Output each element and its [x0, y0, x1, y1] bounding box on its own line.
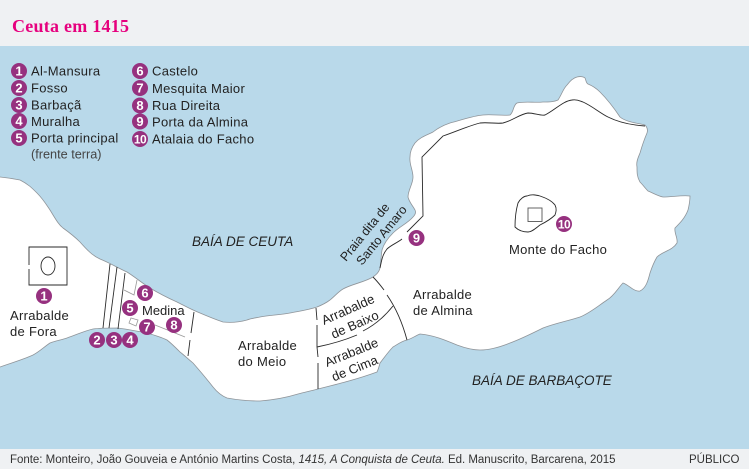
isthmus walls: fosso, barbaca, muralha: [103, 264, 194, 356]
district label: Medina: Medina: [142, 303, 185, 318]
legend label 7: Mesquita Maior: [152, 81, 245, 96]
map: land of Ceuta: [0, 77, 690, 401]
header band: [0, 0, 749, 46]
district label: Arrabalde de Baixo: Arrabalde: [319, 291, 377, 328]
legend label 5: Porta principal: [31, 130, 119, 146]
legend item 2: [11, 80, 27, 96]
legend item 6: [132, 63, 148, 79]
legend item 4: [11, 113, 27, 129]
legend item 10: 10: [134, 132, 147, 146]
legend item 8: [132, 98, 148, 114]
legend item 7: 7: [136, 80, 144, 96]
legend label 9: Porta da Almina: [152, 114, 249, 130]
legend item 6: 6: [136, 64, 144, 78]
fort of Al-Mansura: [29, 247, 67, 285]
beach label: Santo Amaro: [354, 203, 410, 268]
map marker 5: [122, 300, 138, 316]
publisher credit: PÚBLICO: [689, 453, 740, 466]
legend label 8: Rua Direita: [152, 98, 221, 113]
map marker 8: [166, 317, 182, 333]
map marker 7: [139, 319, 155, 335]
legend label 2: Fosso: [31, 80, 68, 96]
title: Ceuta em 1415: [12, 16, 129, 36]
map marker 6: [137, 285, 153, 301]
legend item 9: [132, 114, 148, 130]
map marker 9: [408, 230, 424, 246]
legend item 3: [11, 97, 27, 113]
map marker 6: 6: [141, 286, 149, 300]
map marker 9: 9: [413, 230, 420, 246]
legend label 10: Atalaia do Facho: [152, 132, 254, 146]
bay label Ceuta: BAÍA DE CEUTA: [192, 234, 293, 249]
legend item 10: [132, 131, 148, 147]
legend label 1: Al-Mansura: [31, 64, 101, 78]
footer band: [0, 449, 749, 469]
map marker 8: 8: [170, 318, 178, 332]
legend item 3: 3: [15, 98, 23, 112]
legend: [11, 63, 254, 162]
district label: Arrabalde de Fora: de Fora: [10, 324, 57, 339]
legend item 5: 5: [15, 130, 23, 146]
legend item 8: 8: [136, 98, 144, 113]
medina streets and mosque: [124, 280, 185, 337]
legend note 5: (frente terra): [31, 148, 102, 162]
map marker 5: 5: [126, 300, 134, 316]
map marker 1: 1: [40, 288, 48, 304]
legend item 4: 4: [15, 114, 23, 128]
district label: Arrabalde do Meio: Arrabalde: [238, 338, 297, 353]
district label: Arrabalde de Cima: Arrabalde: [323, 335, 380, 370]
district label: Arrabalde de Fora: Arrabalde: [10, 308, 69, 323]
legend item 9: 9: [136, 114, 144, 129]
legend label 3: Barbaçã: [31, 98, 82, 112]
map marker 10: [556, 216, 572, 232]
map marker 1: [36, 288, 52, 304]
legend item 7: [132, 80, 148, 96]
map marker 3: 3: [110, 332, 118, 348]
legend item 1: [11, 63, 27, 79]
legend label 6: Castelo: [152, 64, 198, 78]
district boundaries: [316, 277, 407, 389]
city wall of Almina: [380, 100, 645, 268]
map marker 4: 4: [126, 332, 134, 348]
legend item 5: [11, 130, 27, 146]
Monte do Facho hill and tower: [515, 195, 556, 232]
map marker 2: [89, 332, 105, 348]
bay label Barbacote: BAÍA DE BARBAÇOTE: [472, 373, 613, 388]
district label: Arrabalde de Almina: Arrabalde: [413, 287, 472, 302]
district label: Arrabalde de Baixo: de Baixo: [329, 307, 381, 342]
map marker 7: 7: [143, 320, 151, 334]
legend item 2: 2: [15, 80, 23, 96]
beach label: Praia dita de: [337, 200, 393, 264]
legend label 4: Muralha: [31, 114, 81, 129]
map marker 10: 10: [558, 218, 571, 232]
map marker 4: [122, 332, 138, 348]
district label: Arrabalde de Cima: de Cima: [329, 352, 381, 384]
district label: Arrabalde do Meio: do Meio: [238, 354, 286, 369]
place label: Monte do Facho: Monte do Facho: [509, 242, 607, 257]
district label: Arrabalde de Almina: de Almina: [413, 303, 473, 318]
beach label: [337, 193, 410, 273]
map marker 2: 2: [93, 332, 101, 348]
map marker 3: [106, 332, 122, 348]
source text: Fonte: Monteiro, João Gouveia e António Martins Costa, 1415, A Conquista de Ceuta. Ed. Manuscrito, Barcarena, 2015: [10, 454, 615, 466]
legend item 1: 1: [15, 64, 23, 78]
